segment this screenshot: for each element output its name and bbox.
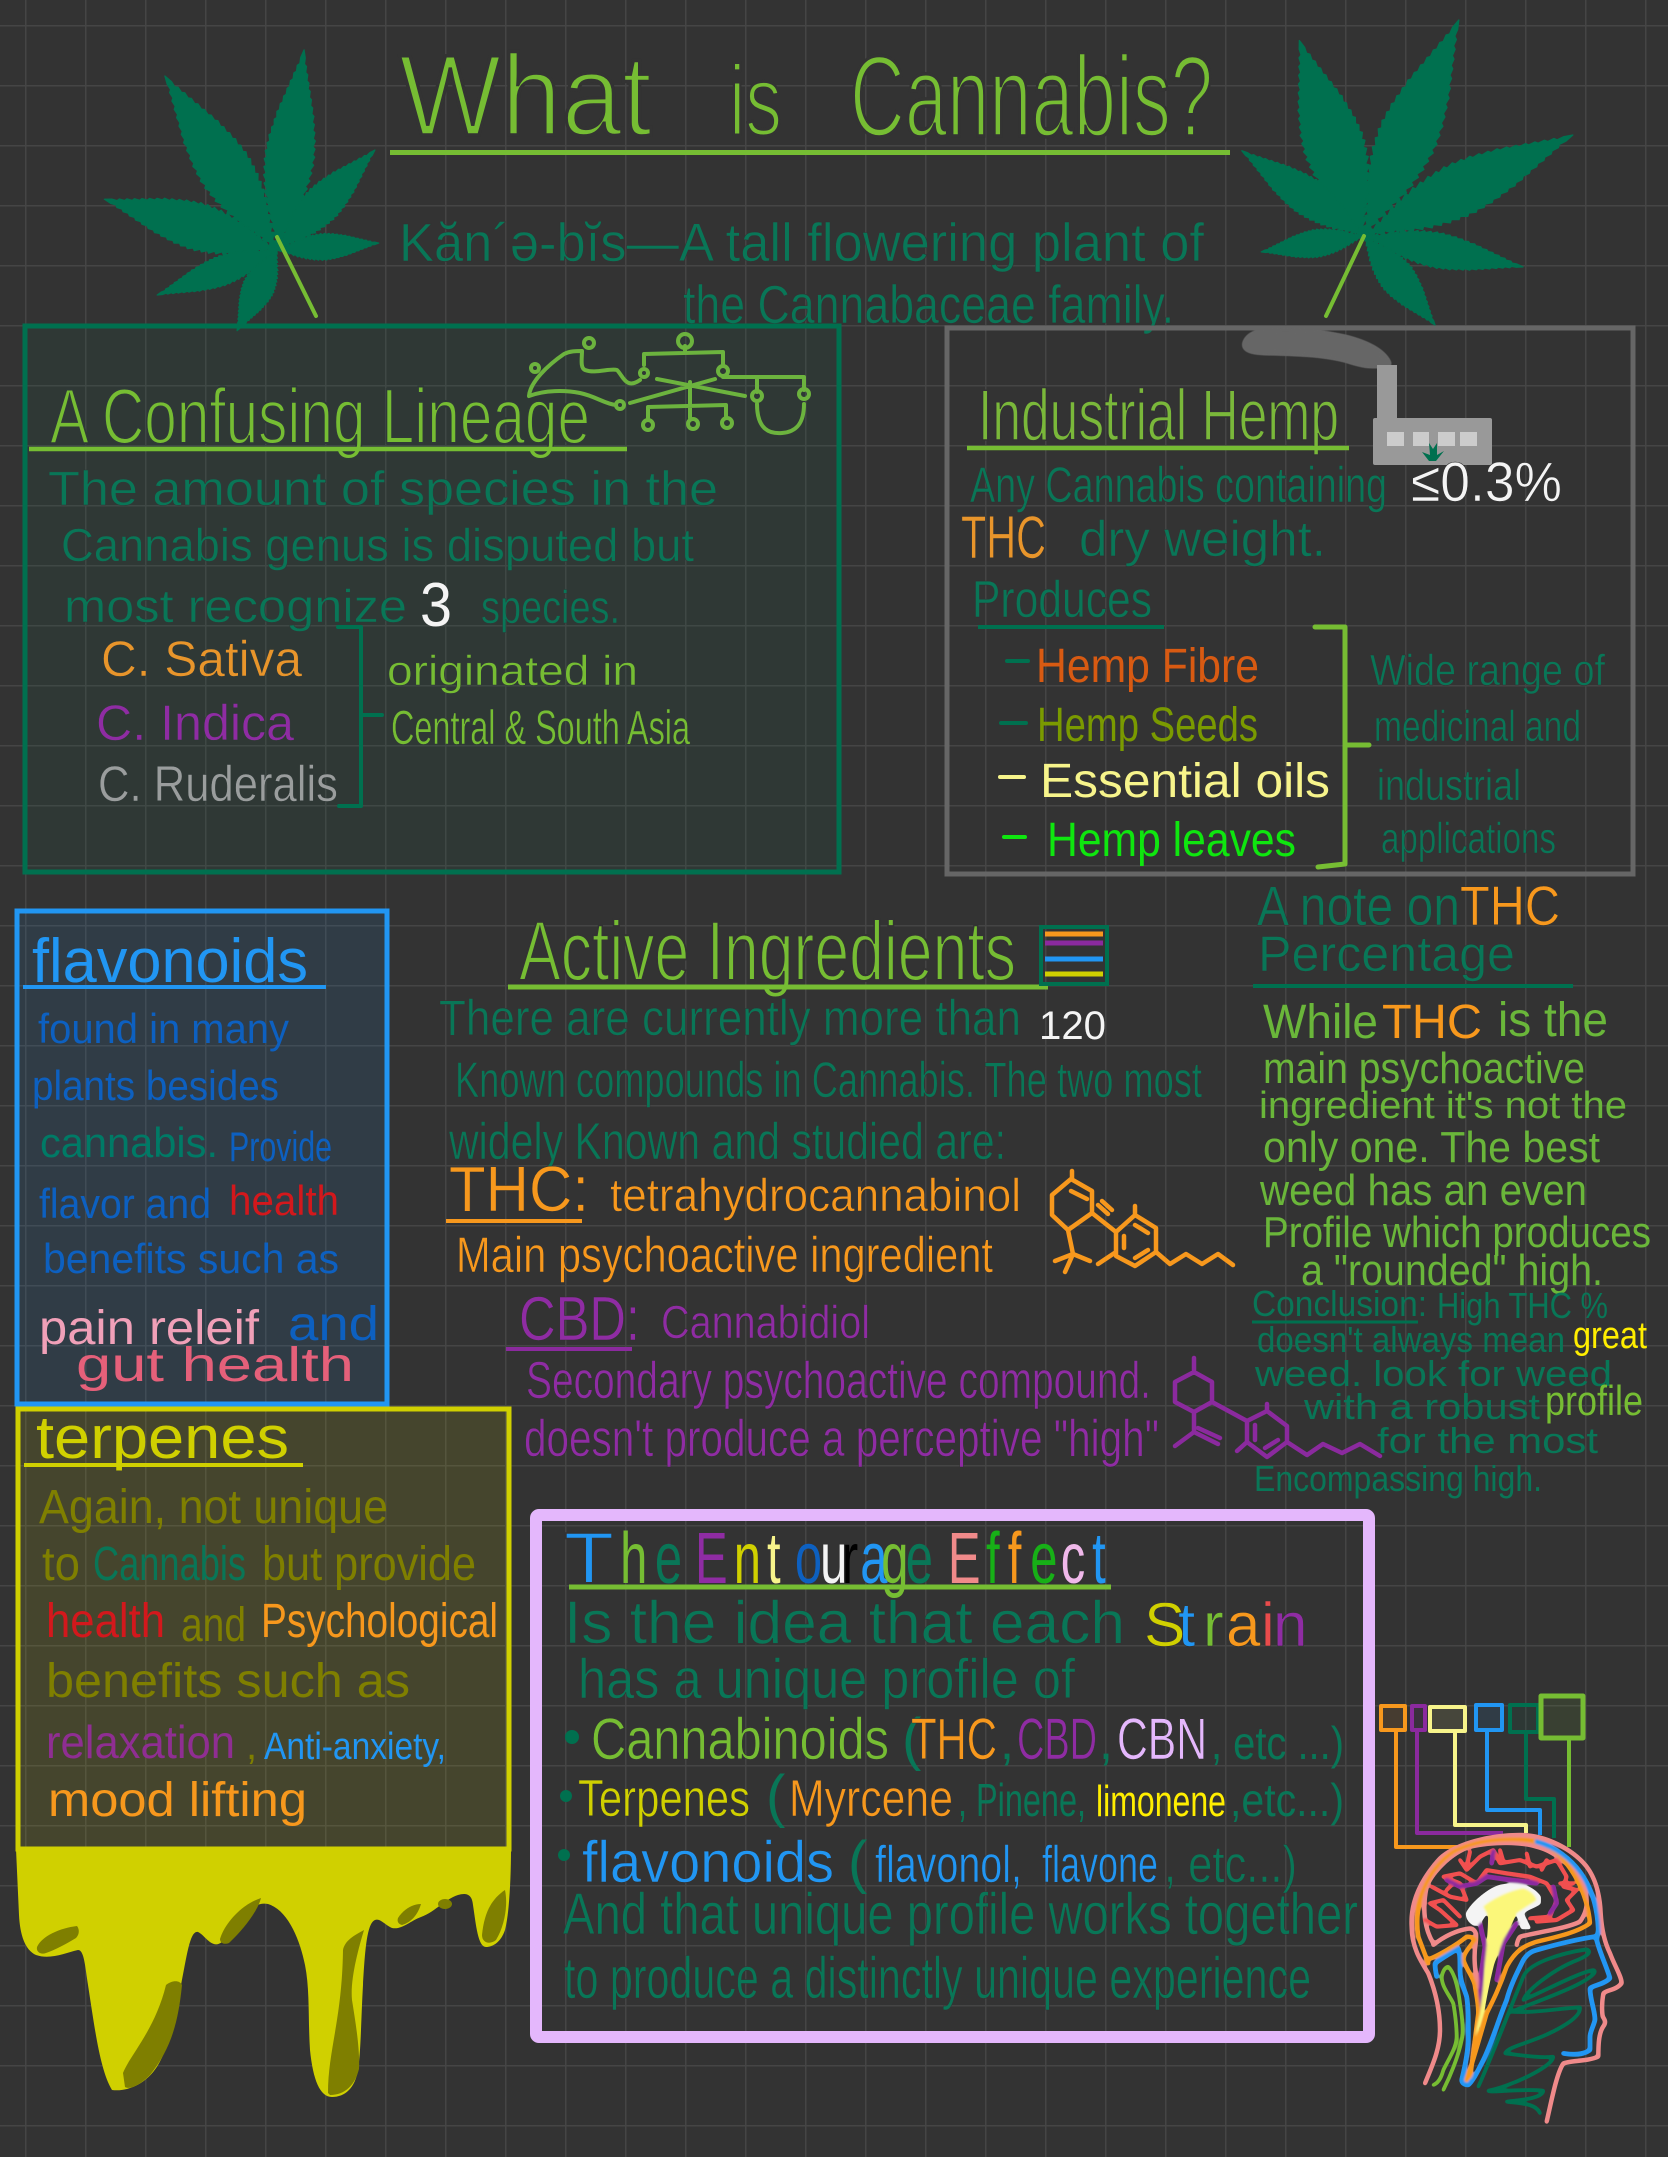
list item: flavonoids: flavonol, xyxy=(875,1836,1022,1894)
definition subtitle: the Cannabaceae family. xyxy=(683,275,1174,335)
text: terpenes description: Anti-anxiety, xyxy=(264,1726,446,1768)
dripping honey shape xyxy=(16,1849,511,2097)
icon: colour-coded boxes wired to brain xyxy=(1381,1696,1583,1847)
text: flavonoids description: cannabis. xyxy=(40,1119,218,1166)
heading: industrial hemp: Industrial Hemp xyxy=(978,376,1339,456)
heading: the entourage effect: e xyxy=(906,1519,933,1599)
heading: the entourage effect: E xyxy=(695,1519,728,1599)
heading: the entourage effect: E xyxy=(948,1519,981,1599)
heading: note on THC percentage: THC xyxy=(1460,874,1560,937)
text: entourage idea: a xyxy=(1226,1591,1261,1660)
list item: flavonoids: , etc...) xyxy=(1164,1836,1297,1894)
heading: the entourage effect: n xyxy=(734,1519,761,1599)
list item: terpenes: Terpenes xyxy=(578,1770,750,1828)
text: THC explanation: main psychoactive xyxy=(1263,1044,1585,1093)
text: THC: tetrahydrocannabinol xyxy=(610,1169,1021,1221)
list: three species: C. Indica xyxy=(96,695,294,751)
panel: industrial hemp xyxy=(947,328,1633,874)
text: THC: THC: xyxy=(449,1153,589,1225)
text: conclusion: doesn't always mean xyxy=(1257,1319,1565,1360)
text: flavonoids description xyxy=(32,1005,379,1392)
icon: head and brain cross-section xyxy=(1412,1835,1622,2122)
text: entourage idea: i xyxy=(1261,1591,1275,1660)
text: THC explanation: is the xyxy=(1498,994,1608,1047)
heading: the entourage effect: t xyxy=(1092,1519,1106,1599)
text: flavonoids description: benefits such as xyxy=(43,1235,339,1282)
list: hemp products xyxy=(1000,640,1330,867)
heading: note on THC percentage xyxy=(1253,874,1573,986)
text: flavonoids description: flavor and xyxy=(39,1180,211,1227)
text: compound intro xyxy=(439,990,1202,1171)
text: terpenes description: relaxation xyxy=(46,1716,235,1768)
text: CBD: doesn't produce a perceptive "high" xyxy=(524,1410,1159,1468)
text: origin xyxy=(387,647,690,755)
text: conclusion xyxy=(1252,1283,1647,1499)
text: terpenes description: to xyxy=(42,1538,80,1591)
list: three species: C. Sativa xyxy=(101,631,302,687)
text: flavonoids description: health xyxy=(229,1177,339,1224)
list item: cannabinoids: , etc ...) xyxy=(1211,1717,1344,1769)
text: terpenes description: Again, not unique xyxy=(39,1481,388,1534)
list item: flavonoids: flavonoids xyxy=(582,1830,834,1895)
heading: the entourage effect: o xyxy=(795,1519,822,1599)
icon: striped compound box xyxy=(1041,927,1107,984)
title: What xyxy=(399,32,652,160)
text: flavonoids description: Provide xyxy=(229,1123,332,1170)
text: applications: medicinal and xyxy=(1374,702,1581,751)
list item: terpenes: ,etc...) xyxy=(1230,1774,1344,1826)
panel: the entourage effect xyxy=(536,1515,1369,2037)
text: applications: Wide range of xyxy=(1370,646,1606,695)
list item: cannabinoids: CBD xyxy=(1017,1707,1097,1772)
list: hemp products: Hemp Fibre xyxy=(1036,640,1259,693)
text: THC explanation: weed has an even xyxy=(1259,1166,1587,1215)
text: conclusion: profile xyxy=(1545,1377,1643,1424)
list item: terpenes: limonene xyxy=(1096,1777,1226,1826)
text: entourage idea: S xyxy=(1144,1591,1185,1660)
icon: lineage tree diagram xyxy=(529,334,809,433)
text: species intro xyxy=(48,463,718,633)
text: THC explanation: a "rounded" high. xyxy=(1301,1246,1603,1295)
number: 3 species: 3 xyxy=(420,571,452,640)
heading: the entourage effect: f xyxy=(1008,1519,1022,1599)
text: conclusion: with a robust xyxy=(1303,1386,1540,1427)
text: THC xyxy=(446,1153,1021,1283)
heading: the entourage effect: T xyxy=(564,1519,614,1599)
text: terpenes description: , xyxy=(246,1724,257,1768)
heading: produces: Produces xyxy=(972,571,1152,629)
text: entourage idea: n xyxy=(1273,1591,1307,1660)
text: hemp definition xyxy=(961,450,1562,571)
text: conclusion: Conclusion: xyxy=(1252,1283,1427,1324)
panel: a confusing lineage xyxy=(25,326,839,872)
text: hemp definition: Any Cannabis containing xyxy=(970,457,1387,513)
list: hemp products: Essential oils xyxy=(1040,755,1330,808)
list: hemp products: Hemp Seeds xyxy=(1037,699,1258,752)
text: unique experience xyxy=(563,1882,1358,2011)
list: three species: C. Ruderalis xyxy=(98,756,338,812)
text: THC: Main psychoactive ingredient xyxy=(456,1227,993,1283)
text: entourage idea: t xyxy=(1178,1591,1195,1660)
text: entourage idea: Is the idea that each xyxy=(564,1589,1125,1656)
text: terpenes description xyxy=(39,1481,498,1827)
list item: cannabinoids xyxy=(565,1707,1344,1772)
definition subtitle xyxy=(399,213,1205,335)
text: CBD: Secondary psychoactive compound. xyxy=(526,1352,1151,1410)
section: note on THC percentage xyxy=(1252,874,1651,1499)
title xyxy=(390,32,1230,161)
text: conclusion: High THC % xyxy=(1437,1285,1608,1326)
heading: the entourage effect: c xyxy=(1061,1519,1085,1599)
heading: note on THC percentage: A note on xyxy=(1257,874,1460,937)
definition subtitle: Kăn´ə-bĭs—A tall flowering plant of xyxy=(399,213,1205,273)
heading: the entourage effect: r xyxy=(842,1519,858,1599)
list item: terpenes: ( xyxy=(766,1764,785,1829)
heading: active ingredients: Active Ingredients xyxy=(519,904,1016,998)
list: hemp products: Hemp leaves xyxy=(1047,814,1296,867)
text: entourage idea: r xyxy=(1203,1591,1224,1660)
text: CBD: CBD: xyxy=(519,1285,640,1354)
text: conclusion: Encompassing high. xyxy=(1254,1458,1542,1499)
text: origin: Central & South Asia xyxy=(391,702,690,755)
icon: factory with smoke xyxy=(1244,330,1492,465)
text: entourage idea xyxy=(564,1589,1307,1710)
heading: the entourage effect: e xyxy=(655,1519,682,1599)
heading: terpenes: terpenes xyxy=(36,1404,289,1471)
list item: flavonoids: flavone xyxy=(1042,1836,1158,1894)
panel: flavonoids xyxy=(17,911,387,1404)
text: CBD xyxy=(506,1285,1159,1468)
list item: cannabinoids: ( xyxy=(902,1707,921,1772)
icon: CBD molecule xyxy=(1175,1358,1380,1457)
list item: terpenes: , Pinene, xyxy=(958,1774,1086,1826)
text: flavonoids description: pain releif xyxy=(39,1302,260,1355)
list item: flavonoids: ( xyxy=(848,1830,867,1895)
number: 120 compounds: 120 xyxy=(1039,1004,1106,1048)
text: THC explanation: While xyxy=(1263,996,1378,1049)
text: applications: industrial xyxy=(1377,761,1521,810)
list item: terpenes xyxy=(560,1764,1344,1829)
title: Cannabis? xyxy=(850,33,1213,161)
text: species intro: most recognize xyxy=(64,580,407,632)
heading: note on THC percentage: Percentage xyxy=(1258,926,1515,982)
title: is xyxy=(729,45,782,157)
text: hemp definition: THC xyxy=(961,504,1046,571)
text: conclusion: great xyxy=(1573,1315,1647,1357)
heading: the entourage effect: h xyxy=(620,1519,647,1599)
list item: cannabinoids: Cannabinoids xyxy=(591,1707,889,1772)
text: THC explanation: only one. The best xyxy=(1263,1123,1600,1172)
list item: cannabinoids: , xyxy=(1000,1714,1014,1770)
text: species intro: Cannabis genus is disputed but xyxy=(61,519,694,571)
heading: the entourage effect: a xyxy=(860,1519,888,1599)
list item: terpenes: Myrcene xyxy=(789,1770,953,1828)
list item: cannabinoids: THC xyxy=(911,1707,997,1772)
text: unique experience: to produce a distinctly unique experience xyxy=(564,1946,1311,2011)
text: applications: applications xyxy=(1381,814,1556,863)
text: terpenes description: health xyxy=(46,1595,165,1648)
text: terpenes description: and xyxy=(181,1599,246,1652)
list: three species xyxy=(96,631,338,812)
text: species intro: species. xyxy=(481,581,620,633)
icon: left cannabis leaf xyxy=(98,46,389,338)
text: THC explanation: THC xyxy=(1382,996,1482,1049)
heading: a confusing lineage: A Confusing Lineage xyxy=(50,372,590,460)
text: THC explanation: ingredient it's not the xyxy=(1259,1085,1627,1127)
heading: the entourage effect: t xyxy=(767,1519,781,1599)
text: terpenes description: Psychological xyxy=(261,1595,498,1648)
heading: the entourage effect: f xyxy=(986,1519,1000,1599)
text: hemp definition: ≤0.3% xyxy=(1411,450,1562,513)
text: hemp definition: dry weight. xyxy=(1079,511,1326,567)
list item: flavonoids xyxy=(558,1830,1297,1895)
text: terpenes description: but provide xyxy=(262,1538,476,1591)
text: terpenes description: Cannabis xyxy=(93,1538,246,1591)
text: entourage idea: has a unique profile of xyxy=(578,1647,1075,1710)
text: flavonoids description: plants besides xyxy=(32,1062,279,1109)
heading: flavonoids: flavonoids xyxy=(32,927,308,996)
heading: the entourage effect xyxy=(564,1519,1111,1599)
section: active ingredients xyxy=(439,904,1380,1468)
text: terpenes description: benefits such as xyxy=(46,1655,410,1708)
text: compound intro: Known compounds in Cannabis. The two most xyxy=(455,1052,1202,1108)
heading: the entourage effect: u xyxy=(820,1519,847,1599)
heading: the entourage effect: e xyxy=(1030,1519,1057,1599)
text: conclusion: weed. look for weed xyxy=(1254,1353,1612,1394)
text: unique experience: And that unique profile works together xyxy=(563,1882,1358,1947)
text: conclusion: for the most xyxy=(1377,1420,1598,1461)
text: species intro: The amount of species in the xyxy=(48,463,718,516)
text: flavonoids description: gut health xyxy=(76,1339,354,1392)
bracket xyxy=(338,627,382,806)
bracket xyxy=(1315,627,1369,867)
text: flavonoids description: and xyxy=(288,1298,379,1351)
text: THC explanation xyxy=(1259,994,1651,1295)
text: compound intro: widely Known and studied are: xyxy=(448,1113,1006,1171)
text: compound intro: There are currently more than xyxy=(439,990,1021,1046)
list item: cannabinoids: CBN xyxy=(1117,1707,1207,1772)
heading: the entourage effect: g xyxy=(881,1519,909,1599)
text: origin: originated in xyxy=(387,647,638,694)
text: CBD: Cannabidiol xyxy=(661,1296,870,1348)
text: flavonoids description: found in many xyxy=(38,1005,289,1052)
icon: THC molecule xyxy=(1052,1171,1233,1272)
text: terpenes description: mood lifting xyxy=(48,1774,307,1827)
text: applications xyxy=(1370,646,1606,863)
panel: terpenes xyxy=(16,1404,511,2097)
icon: right cannabis leaf xyxy=(1231,8,1585,336)
list item: cannabinoids: , xyxy=(1099,1714,1113,1770)
